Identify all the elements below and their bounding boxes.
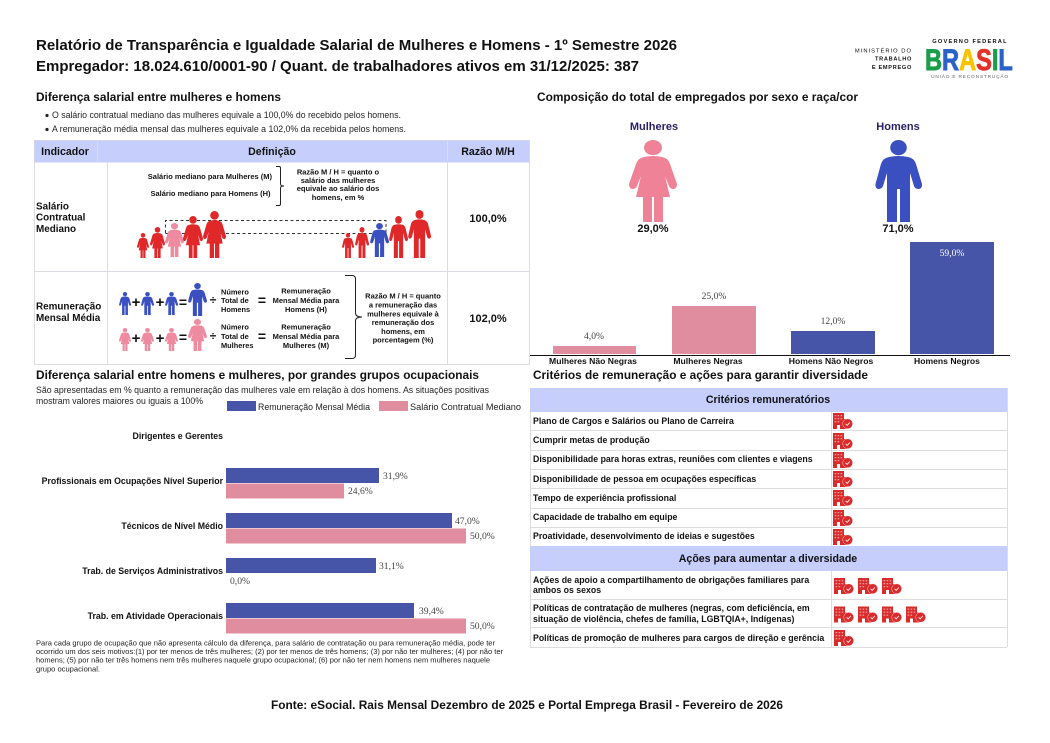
definition note: average ratio: remuneração dos <box>372 318 434 327</box>
legend <box>227 401 521 412</box>
bar chart: sex and race: Homens Não Negros <box>789 356 873 366</box>
equation: men average: Homens <box>221 305 250 314</box>
table: actions: Ações de apoio a compartilhamento de obrigações familiares para <box>533 575 809 585</box>
equation: men average: ÷ <box>210 293 217 307</box>
bullet text: O salário contratual mediano das mulheres equivale a 100,0% do recebido pelos homens. <box>52 110 401 120</box>
table: criteria: Cumprir metas de produção <box>533 435 650 445</box>
equation: men average: Número <box>221 288 249 296</box>
table: actions: Políticas de promoção de mulheres para cargos de direção e gerência <box>533 633 824 643</box>
ministry and government logo: BRASIL <box>925 42 1013 77</box>
panel: occupational groups: mostram valores maiores ou iguais a 100% <box>36 396 203 406</box>
table: criteria: Critérios remuneratórios <box>706 394 830 406</box>
ministry and government logo <box>855 39 1013 80</box>
ministry and government logo: GOVERNO FEDERAL <box>932 39 1008 45</box>
icons: women group <box>137 211 226 258</box>
definition note: average ratio: mulheres equivale à <box>367 310 440 318</box>
heading: occupational groups: Diferença salarial entre homens e mulheres, por grandes grupos ocupacionais <box>36 368 479 382</box>
heading: wage difference: Diferença salarial entre mulheres e homens <box>36 90 281 104</box>
definition note: median ratio: homens, em % <box>312 193 365 202</box>
title: Relatório de Transparência e Igualdade Salarial de Mulheres e Homens - 1º Semestre 2026 <box>36 37 677 54</box>
definition note: average ratio: a remuneração das <box>369 300 437 310</box>
title: Empregador: 18.024.610/0001-90 / Quant. de trabalhadores ativos em 31/12/2025: 387 <box>36 58 639 75</box>
equation: men average: + <box>156 294 165 311</box>
definition labels: median wages <box>148 172 272 198</box>
equation: men average: = <box>258 292 266 308</box>
table header: Definição <box>248 146 296 158</box>
row label: remuneração mensal média: Mensal Média <box>36 313 101 324</box>
equation: women average: ÷ <box>210 329 217 343</box>
footnote <box>36 638 503 674</box>
table: actions: ambos os sexos <box>533 585 601 595</box>
ministry and government logo: UNIÃO E RECONSTRUÇÃO <box>931 73 1009 80</box>
panel: criteria and actions <box>530 368 1008 648</box>
bar chart: occupational: 50,0% <box>470 531 495 542</box>
heading: criteria and actions: Critérios de remuneração e ações para garantir diversidade <box>533 368 868 382</box>
legend: Salário Contratual Mediano <box>410 402 521 412</box>
bullet text: A remuneração média mensal das mulheres equivale a 102,0% da recebida pelos homens. <box>52 124 406 134</box>
bar chart: occupational: Trab. em Atividade Operacionais <box>88 611 223 621</box>
bar chart: sex and race: 4,0% <box>584 331 604 342</box>
brace: median <box>276 166 284 206</box>
row label: remuneração mensal média: Remuneração <box>36 302 101 312</box>
median dashed lines <box>166 220 386 234</box>
heading: composition: Composição do total de empregados por sexo e raça/cor <box>537 90 858 104</box>
panel: occupational groups <box>36 368 521 674</box>
bar chart: sex and race: Mulheres Negras <box>673 356 743 366</box>
equation: women average: Mulheres (M) <box>283 341 330 350</box>
row label: salário contratual mediano: Salário <box>36 202 69 212</box>
source note: Fonte: eSocial. Rais Mensal Dezembro de 2025 e Portal Emprega Brasil - Fevereiro de 2026 <box>271 698 783 712</box>
table: criteria: Tempo de experiência profissional <box>533 493 676 503</box>
panel: wage difference <box>34 90 530 364</box>
bar chart: occupational: 39,4% <box>419 606 444 617</box>
footnote: Para cada grupo de ocupação que não apresenta cálculo da diferença, para salário de contratação ou para remuneração média, pode ter <box>36 638 495 648</box>
definition note: median ratio: Razão M / H = quanto o <box>297 168 379 176</box>
definition labels: median wages: Salário mediano para Mulheres (M) <box>148 172 272 181</box>
equation: men average: Homens (H) <box>285 305 328 314</box>
equation: women average: Mensal Média para <box>273 332 340 341</box>
men share <box>875 121 922 235</box>
equation: men average: = <box>179 294 187 310</box>
subtitle: São apresentadas em % quanto a remuneração das mulheres vale em relação à dos homens. As situações positivas <box>36 385 490 395</box>
bar chart: occupational <box>42 431 495 634</box>
value: 102,0%: 102,0% <box>469 313 507 325</box>
equation: women average: = <box>258 328 266 344</box>
definition note: median ratio: salário das mulheres <box>301 176 375 185</box>
equation: men average <box>119 283 340 316</box>
definition note: average ratio: homens, em <box>381 327 425 336</box>
bar chart: occupational: 47,0% <box>455 516 480 527</box>
footnote: homens; (5) por não ter três homens nem três mulheres naquele grupo ocupacional; (6) por não ter nem homens nem mulheres naquele <box>36 656 490 664</box>
table: criteria: Capacidade de trabalho em equipe <box>533 512 678 522</box>
ministry and government logo: MINISTÉRIO DO <box>855 48 912 54</box>
equation: men average: Mensal Média para <box>273 296 340 305</box>
table: criteria: Disponibilidade para horas extras, reuniões com clientes e viagens <box>533 454 813 464</box>
icons: men group <box>342 210 431 258</box>
bar chart: sex and race <box>530 242 1010 366</box>
bar chart: sex and race: 25,0% <box>702 291 726 302</box>
table: actions: Políticas de contratação de mulheres (negras, com deficiência, em <box>533 603 810 613</box>
women share <box>629 121 678 235</box>
footnote: grupo ocupacional. <box>36 664 100 674</box>
table: indicators <box>34 140 530 364</box>
equation: women average: + <box>132 330 141 347</box>
ministry and government logo: TRABALHO <box>875 56 912 62</box>
definition note: average ratio: porcentagem (%) <box>373 336 434 344</box>
table header <box>41 146 515 158</box>
definition labels: median wages: Salário mediano para Homens (H) <box>150 189 271 198</box>
equation: men average: Total de <box>221 296 249 305</box>
equation: women average: = <box>179 329 187 345</box>
table: criteria: Proatividade, desenvolvimento de ideias e sugestões <box>533 531 755 541</box>
bar chart: sex and race: Homens Negros <box>914 356 980 366</box>
table: criteria: Disponibilidade de pessoa em ocupações específicas <box>533 474 756 484</box>
equation: men average: + <box>132 294 141 311</box>
value: 100,0%: 100,0% <box>469 213 507 225</box>
icons: actions <box>834 578 926 646</box>
bar chart: occupational: 31,1% <box>379 561 404 572</box>
bar chart: sex and race: Mulheres Não Negras <box>549 356 637 366</box>
equation: women average: Total de <box>221 332 249 341</box>
bar chart: sex and race: 12,0% <box>821 316 845 327</box>
equation: women average: + <box>156 330 165 347</box>
table: actions: situação de violência, chefes de família, LGBTQIA+, Indígenas) <box>533 614 794 624</box>
bar chart: sex and race: 59,0% <box>940 248 964 259</box>
men share: Homens <box>876 121 920 133</box>
men share: 71,0% <box>882 223 914 235</box>
table: criteria <box>530 388 1008 647</box>
equation: women average: Mulheres <box>221 341 253 350</box>
footnote: ocorrido um dos seis motivos:(1) por ter menos de três mulheres; (2) por ter menos de três homens; (3) por não ter mulheres; (4) por não ter <box>36 647 503 656</box>
panel: workforce composition <box>530 90 1010 366</box>
bar chart: occupational: Trab. de Serviços Administrativos <box>82 566 223 576</box>
legend: Remuneração Mensal Média <box>258 402 370 412</box>
bar chart: occupational: 31,9% <box>383 471 408 482</box>
brace: average <box>345 276 362 358</box>
bullet text <box>45 110 406 134</box>
table: actions: Ações para aumentar a diversidade <box>679 553 857 565</box>
definition note: average ratio: Razão M / H = quanto <box>365 292 441 300</box>
table: criteria: Plano de Cargos e Salários ou Plano de Carreira <box>533 416 734 426</box>
definition note: median ratio: equivale ao salário dos <box>297 184 379 193</box>
bar chart: occupational: 50,0% <box>470 621 495 632</box>
row label: salário contratual mediano: Mediano <box>36 224 76 235</box>
ministry and government logo: E EMPREGO <box>872 65 912 71</box>
equation: women average: Número <box>221 322 249 332</box>
bar chart: occupational: Técnicos de Nível Médio <box>121 521 223 531</box>
equation: women average <box>119 319 340 351</box>
table header: Indicador <box>41 146 89 158</box>
row label: salário contratual mediano: Contratual <box>36 212 86 224</box>
bar chart: occupational: Dirigentes e Gerentes <box>133 431 223 441</box>
table header: Razão M/H <box>461 146 515 158</box>
equation: men average: Remuneração <box>281 286 331 296</box>
icons: criteria <box>833 413 853 545</box>
bar chart: occupational: 0,0% <box>230 576 250 587</box>
women share: Mulheres <box>630 121 678 133</box>
bar chart: occupational: 24,6% <box>348 486 373 497</box>
equation: women average: Remuneração <box>281 322 331 332</box>
bar chart: occupational: Profissionais em Ocupações Nível Superior <box>42 476 224 486</box>
title <box>36 37 677 75</box>
women share: 29,0% <box>637 223 669 235</box>
table: actions <box>530 546 1007 648</box>
